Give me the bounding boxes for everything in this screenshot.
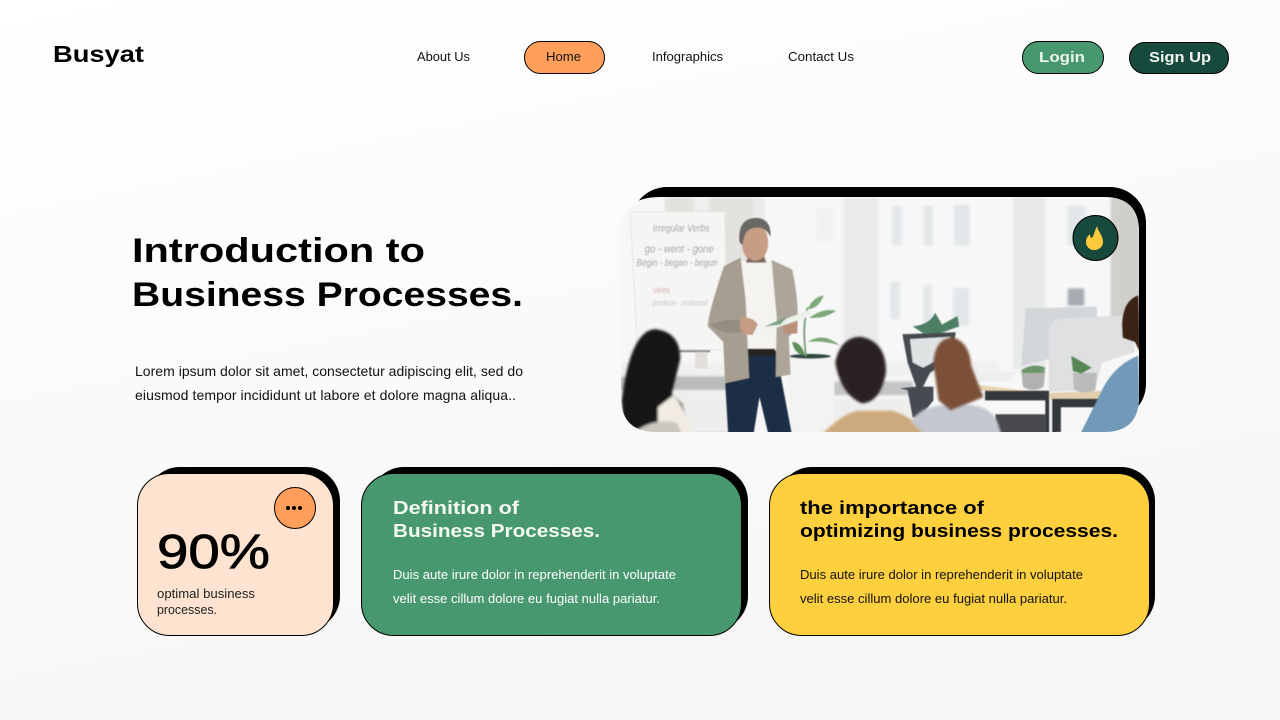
whiteboard: Begin - began - begun	[637, 258, 718, 269]
man on right side	[1056, 294, 1139, 432]
button: Sign Up	[1130, 42, 1228, 74]
logo: Busyat	[53, 41, 144, 67]
stat caption: processes.	[157, 602, 217, 617]
intro paragraph: eiusmod tempor incididunt ut labore et dolore magna aliqua..	[135, 387, 516, 403]
photo black backing	[631, 187, 1146, 420]
plant and planter	[790, 295, 840, 395]
card body text: Duis aute irure dolor in reprehenderit in voluptate	[800, 567, 1083, 582]
audience	[622, 329, 1003, 442]
card body text	[393, 567, 676, 606]
button: Login: Login	[1039, 49, 1085, 66]
card heading	[393, 498, 600, 541]
intro paragraph	[135, 363, 523, 403]
title: Business Processes.	[132, 276, 523, 314]
stat caption: optimal business	[157, 586, 256, 601]
card body text: Duis aute irure dolor in reprehenderit in voluptate	[393, 567, 676, 582]
panel: definition card	[362, 467, 748, 636]
whiteboard: Verbs	[653, 286, 670, 295]
stat value: 90%	[157, 526, 270, 579]
card body text: velit esse cillum dolore eu fugiat nulla pariatur.	[800, 591, 1067, 606]
panel: importance card	[770, 467, 1155, 636]
photo: presenter in office	[620, 194, 1140, 445]
nav item: Home (active pill)	[524, 42, 604, 74]
button: Sign Up: Sign Up	[1149, 49, 1211, 66]
photo panel	[620, 187, 1146, 445]
card heading: Business Processes.	[393, 521, 600, 541]
card heading: the importance of	[800, 498, 985, 518]
card body text: velit esse cillum dolore eu fugiat nulla pariatur.	[393, 591, 660, 606]
intro paragraph: Lorem ipsum dolor sit amet, consectetur adipiscing elit, sed do	[135, 363, 523, 379]
panel: 90% stat card	[138, 467, 340, 636]
card heading: Definition of	[393, 498, 520, 518]
whiteboard: go - went - gone	[645, 243, 714, 255]
card heading	[800, 498, 1118, 541]
title: Introduction to	[132, 232, 425, 270]
nav item: Contact Us: Contact Us	[788, 49, 855, 64]
nav item: Home (active pill): Home	[546, 49, 581, 64]
presenter	[708, 218, 811, 440]
icon: more dots badge	[274, 488, 316, 528]
desks and monitors	[900, 307, 1135, 440]
nav item: Infographics: Infographics	[652, 49, 723, 64]
card heading: optimizing business processes.	[800, 521, 1118, 541]
title	[132, 232, 523, 314]
button: Login	[1022, 42, 1104, 74]
card body text	[800, 567, 1083, 606]
nav item: About Us: About Us	[417, 49, 470, 64]
icon: flame badge	[1073, 216, 1118, 260]
navigation menu	[417, 42, 855, 74]
stat caption	[157, 586, 256, 617]
whiteboard	[630, 212, 727, 369]
whiteboard: Irregular Verbs	[653, 224, 710, 235]
whiteboard: produce - produced	[652, 299, 708, 308]
